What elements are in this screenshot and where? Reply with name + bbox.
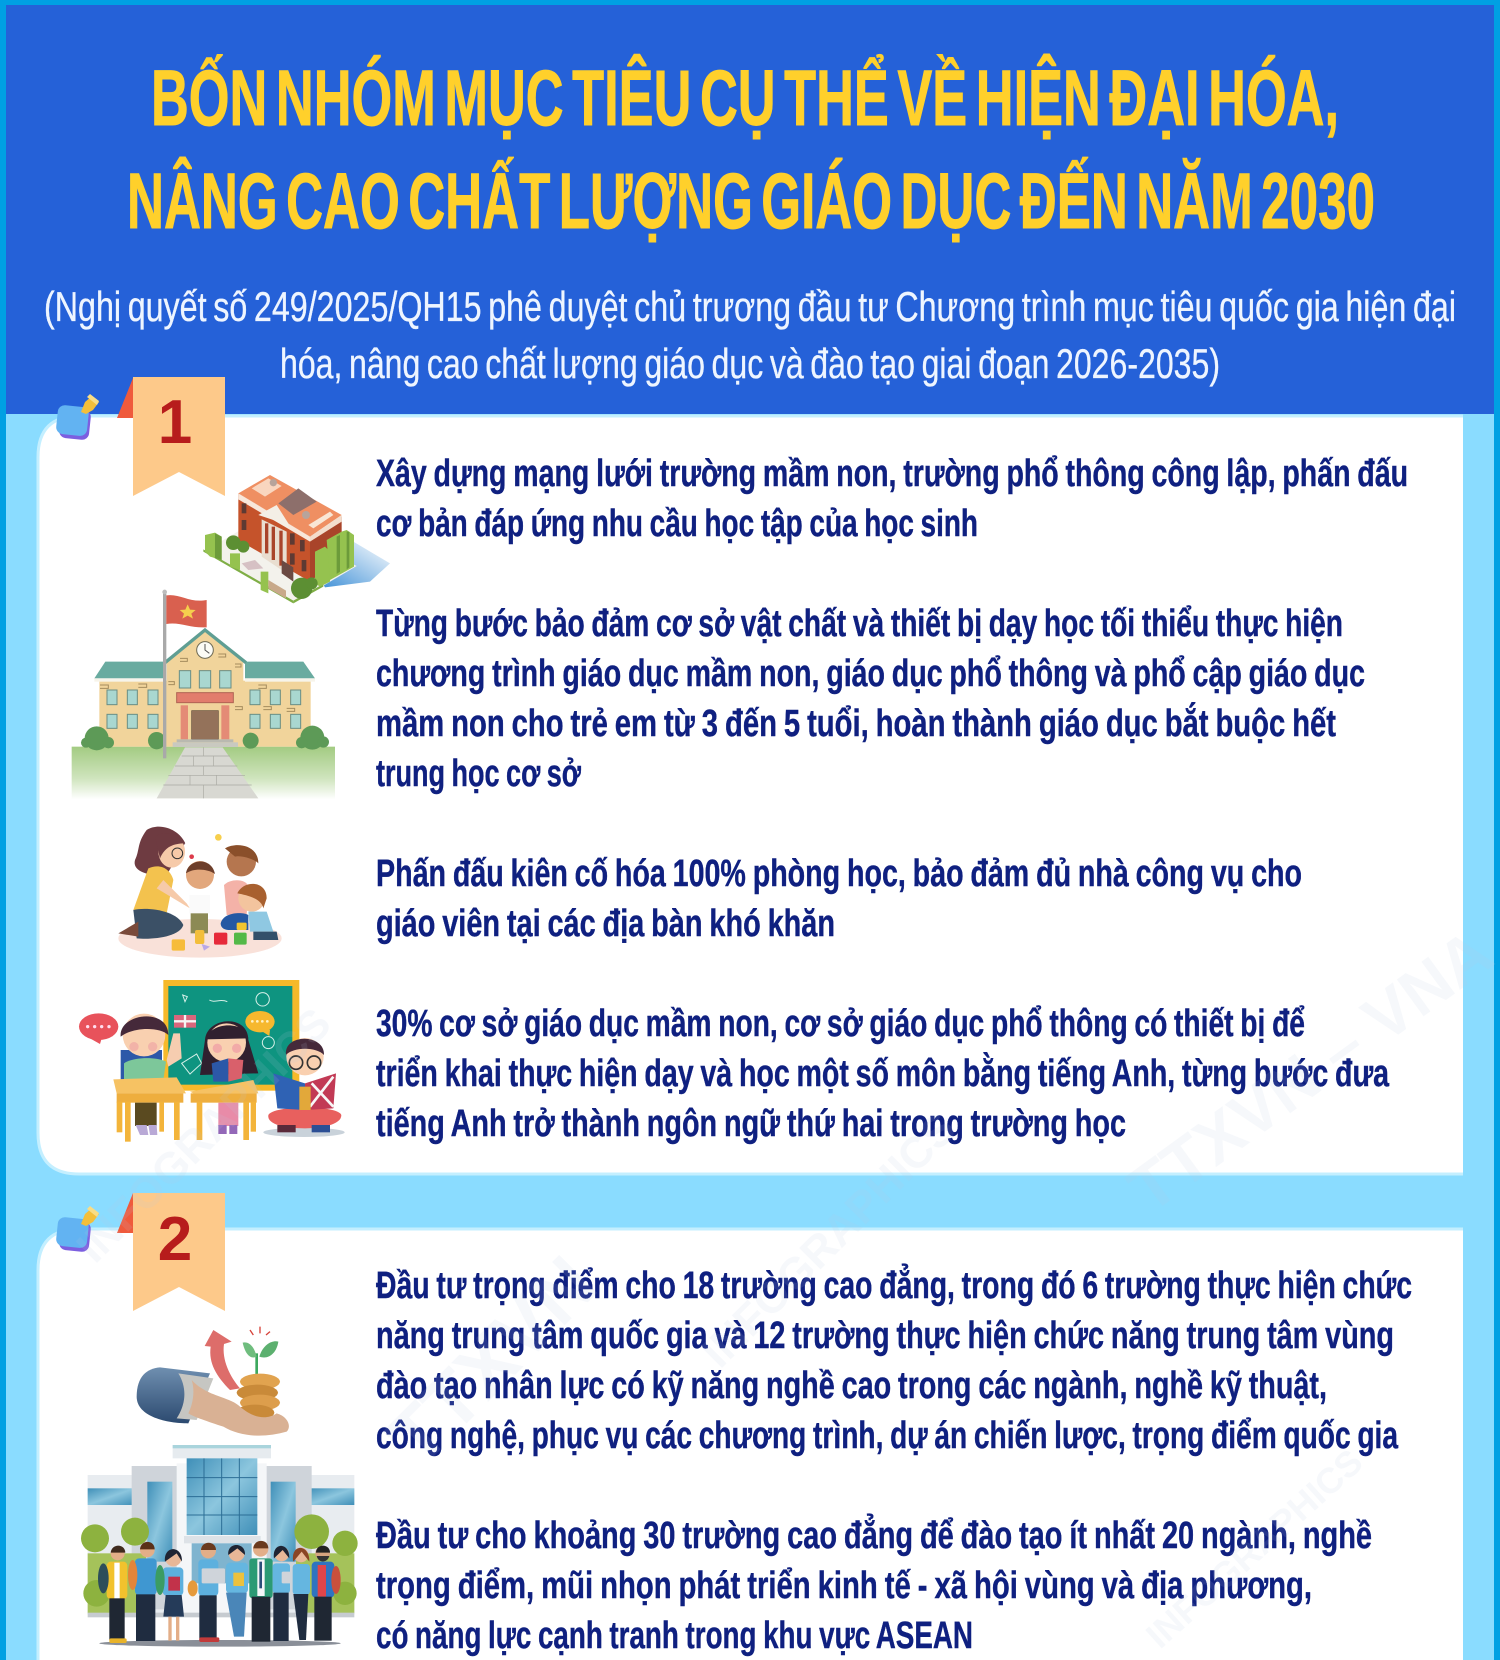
- ribbon number 2: [117, 1193, 225, 1311]
- watermark: INFOGRAPHICS: [67, 999, 341, 1272]
- icon: college building with students: [81, 1445, 358, 1647]
- header band: [6, 5, 1494, 414]
- ribbon number 1: [117, 377, 225, 496]
- icon: isometric brick school: [203, 475, 390, 603]
- panel: group 2 card: [38, 1229, 1463, 1660]
- ribbon number 1: 1: [158, 388, 192, 457]
- title: [127, 53, 1375, 245]
- text block: group 1 objectives: [376, 453, 1408, 1145]
- text block: group 1 objectives: trung học cơ sở: [376, 753, 582, 795]
- subtitle: hóa, nâng cao chất lượng giáo dục và đào tạo giai đoạn 2026-2035): [280, 340, 1220, 387]
- text block: group 1 objectives: giáo viên tại các địa bàn khó khăn: [376, 903, 835, 945]
- ribbon number 2: 2: [158, 1205, 192, 1274]
- watermark: [67, 914, 1500, 1656]
- icon: teacher with children: [118, 827, 282, 958]
- text block: group 2 objectives: [376, 1262, 1412, 1657]
- watermark: TTXVN – VNA: [1115, 914, 1500, 1226]
- text block: group 1 objectives: tiếng Anh trở thành ngôn ngữ thứ hai trong trường học: [376, 1103, 1126, 1145]
- icon: hand holding coins and sapling: [137, 1327, 289, 1436]
- watermark: TTXVN: [370, 1239, 613, 1482]
- icon: pupils with chalkboard: [79, 980, 345, 1142]
- panel: group 1 card: [38, 416, 1463, 1174]
- text block: group 1 objectives: cơ bản đáp ứng nhu cầu học tập của học sinh: [376, 503, 978, 545]
- text block: group 2 objectives: có năng lực cạnh tranh trong khu vực ASEAN: [376, 1615, 973, 1657]
- icon: school with flag: [72, 590, 335, 799]
- subtitle: [44, 283, 1456, 387]
- icon: pinned note 1: [56, 394, 99, 440]
- icon: pinned note 2: [56, 1206, 99, 1252]
- watermark: INFOGRAPHICS: [1138, 1441, 1370, 1656]
- watermark: INFOGRAPHICS: [692, 1104, 966, 1377]
